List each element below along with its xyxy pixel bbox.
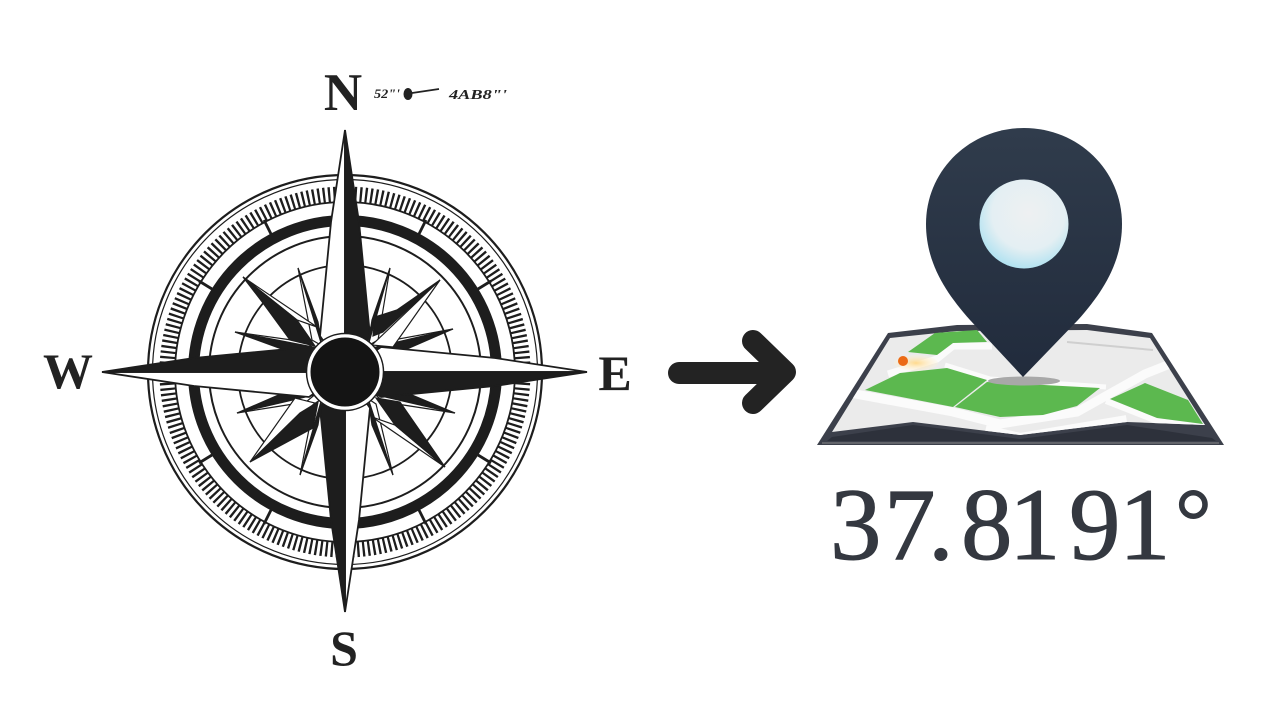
pin lens — [980, 180, 1068, 268]
small annotation beside north: 4AB8"' — [448, 88, 507, 103]
label: west: W — [43, 343, 93, 399]
coordinate value: ° — [1175, 470, 1212, 572]
label: north: N — [324, 64, 362, 122]
map bottom edge — [822, 442, 1219, 444]
secondary star points — [235, 268, 455, 475]
location marker glow — [894, 355, 938, 371]
infographic canvas — [44, 75, 1224, 666]
label: east: E — [598, 345, 632, 401]
compass hub — [306, 334, 384, 410]
label: south: S — [330, 620, 358, 676]
pin shadow — [988, 376, 1060, 386]
compass rose — [102, 130, 587, 612]
compass rings — [148, 175, 542, 569]
green areas — [865, 330, 1203, 424]
main cardinal star — [102, 130, 587, 612]
small annotation beside north — [374, 86, 507, 103]
map roads — [850, 342, 1210, 440]
map — [817, 324, 1224, 445]
map fold shading — [827, 425, 1216, 441]
map sheet — [832, 330, 1205, 435]
coordinate value: 37.8191 — [830, 468, 1170, 582]
map frame — [817, 324, 1224, 445]
arrow — [679, 341, 785, 403]
location pin — [926, 128, 1122, 377]
small annotation beside north: 52"' — [374, 86, 400, 101]
